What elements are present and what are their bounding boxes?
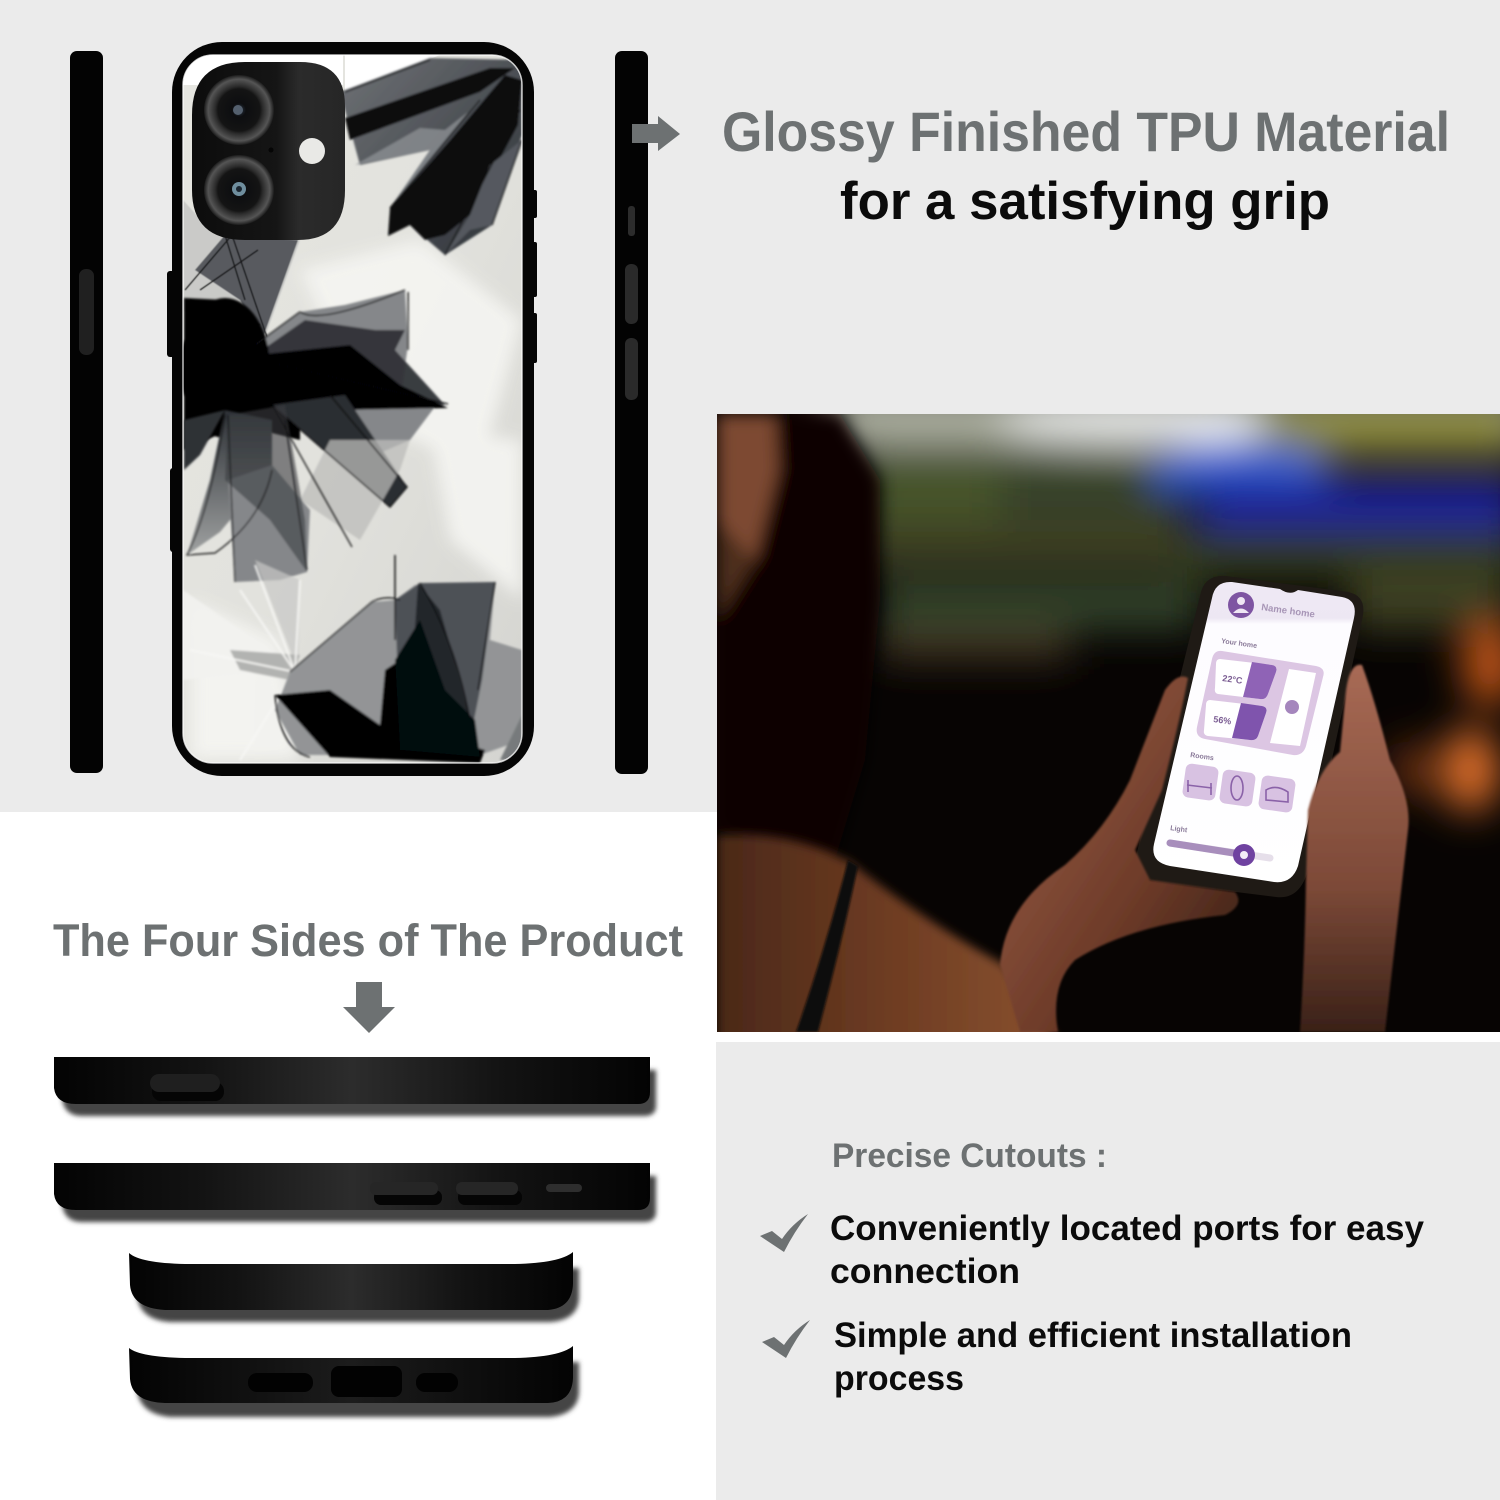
dress strap <box>796 860 858 1032</box>
side strip 2 <box>54 1163 656 1222</box>
top right ribbon <box>340 58 522 255</box>
bottom ribbon <box>275 555 522 763</box>
central bow <box>180 290 448 540</box>
upper lens <box>204 75 274 145</box>
app tile: temperature <box>1215 659 1276 699</box>
background: left grey panel <box>0 0 717 812</box>
side strip 4 <box>129 1346 579 1417</box>
app tile: humidity: 56% <box>1213 714 1232 726</box>
lower bow tails <box>184 405 352 582</box>
arrow: to heading <box>632 116 680 151</box>
camera island <box>192 62 345 240</box>
bullet text two <box>834 1316 1352 1398</box>
icon: check mark one <box>760 1214 808 1252</box>
white separator <box>717 1032 1500 1042</box>
subheading: for a satisfying grip: for a satisfying grip <box>840 172 1330 231</box>
blurred landscape background <box>830 390 1500 812</box>
flash <box>299 138 325 164</box>
side strip 3 <box>129 1252 579 1322</box>
smartphone <box>1136 576 1363 897</box>
app label: rooms: Rooms <box>1190 752 1214 762</box>
side buttons <box>167 190 537 552</box>
app toggle <box>1270 669 1316 746</box>
bullet text one: Conveniently located ports for easy <box>830 1209 1425 1248</box>
photo: person holding phone <box>717 390 1500 1045</box>
app screen <box>1153 582 1355 882</box>
bullet text two: Simple and efficient installation <box>834 1316 1352 1355</box>
background: bottom right grey panel <box>716 1042 1500 1500</box>
lower lens <box>204 155 274 225</box>
heading: precise cutouts: Precise Cutouts : <box>832 1137 1107 1175</box>
shoulder <box>717 834 1060 1045</box>
app tile: humidity <box>1204 700 1266 740</box>
background: bottom left white panel <box>0 812 717 1500</box>
heading: the four sides of the product: The Four Sides of The Product <box>53 915 683 966</box>
arrow: down to sides <box>343 982 395 1033</box>
left side view of case <box>70 51 103 773</box>
printed artwork <box>180 55 522 763</box>
icon: check mark two <box>762 1320 810 1358</box>
glossy rim highlight <box>183 55 522 763</box>
pale flower <box>184 560 301 680</box>
app slider <box>1170 843 1270 866</box>
background: top grey panel <box>0 0 1500 414</box>
left hand <box>1000 676 1238 1032</box>
heading: glossy finished TPU material: Glossy Finished TPU Material <box>722 100 1450 163</box>
right side view of case <box>615 51 648 774</box>
app tile: temperature: 22°C <box>1222 673 1244 686</box>
upper left ribbon <box>184 201 300 338</box>
right hand <box>1300 665 1409 1032</box>
phone case back view <box>167 42 537 776</box>
case body <box>172 42 534 776</box>
side strip 1 <box>54 1057 656 1116</box>
app header avatar <box>1228 592 1254 618</box>
app label: your home: Your home <box>1221 638 1257 650</box>
bullet text one: connection <box>830 1252 1020 1291</box>
app room icons <box>1187 776 1288 802</box>
app label: name home: Name home <box>1261 602 1315 620</box>
app room tiles <box>1182 763 1296 813</box>
head silhouette <box>717 414 890 664</box>
bullet text one <box>830 1209 1425 1291</box>
app label: light: Light <box>1170 825 1188 834</box>
app card: climate <box>1197 651 1324 755</box>
bullet text two: process <box>834 1359 964 1398</box>
